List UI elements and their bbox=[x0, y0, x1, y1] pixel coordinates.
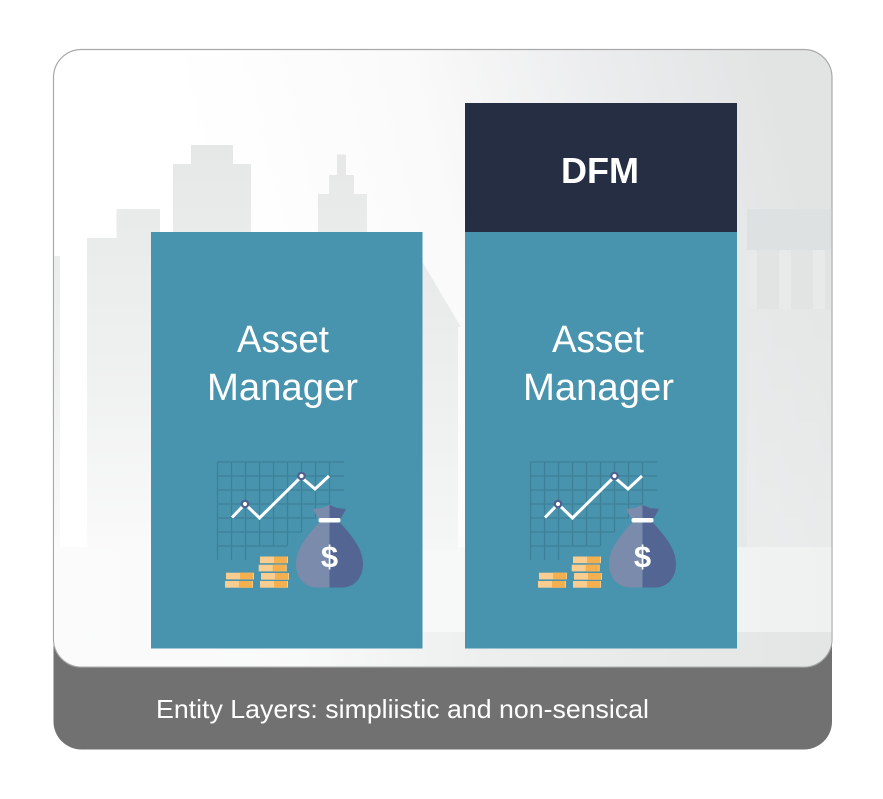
card title: Manager bbox=[207, 367, 358, 409]
card title: Manager bbox=[523, 367, 674, 409]
DFM layer block bbox=[465, 103, 737, 232]
icon: chart with money bag and coins: $ bbox=[634, 539, 651, 574]
city skyline background bbox=[54, 145, 832, 668]
caption text: Entity Layers: simpliistic and non-sensical bbox=[156, 694, 649, 724]
icon: chart with money bag and coins bbox=[218, 462, 363, 588]
card title: Asset bbox=[552, 319, 644, 361]
card title bbox=[523, 319, 674, 409]
DFM label: DFM bbox=[561, 150, 639, 191]
card title: Asset bbox=[237, 319, 329, 361]
icon: chart with money bag and coins bbox=[530, 462, 676, 588]
card: Asset Manager (right) bbox=[465, 232, 737, 648]
card: Asset Manager (left) bbox=[151, 232, 422, 648]
icon: chart with money bag and coins: $ bbox=[321, 539, 338, 574]
main panel bbox=[54, 50, 832, 668]
card title bbox=[207, 319, 358, 409]
caption panel bbox=[54, 600, 832, 750]
